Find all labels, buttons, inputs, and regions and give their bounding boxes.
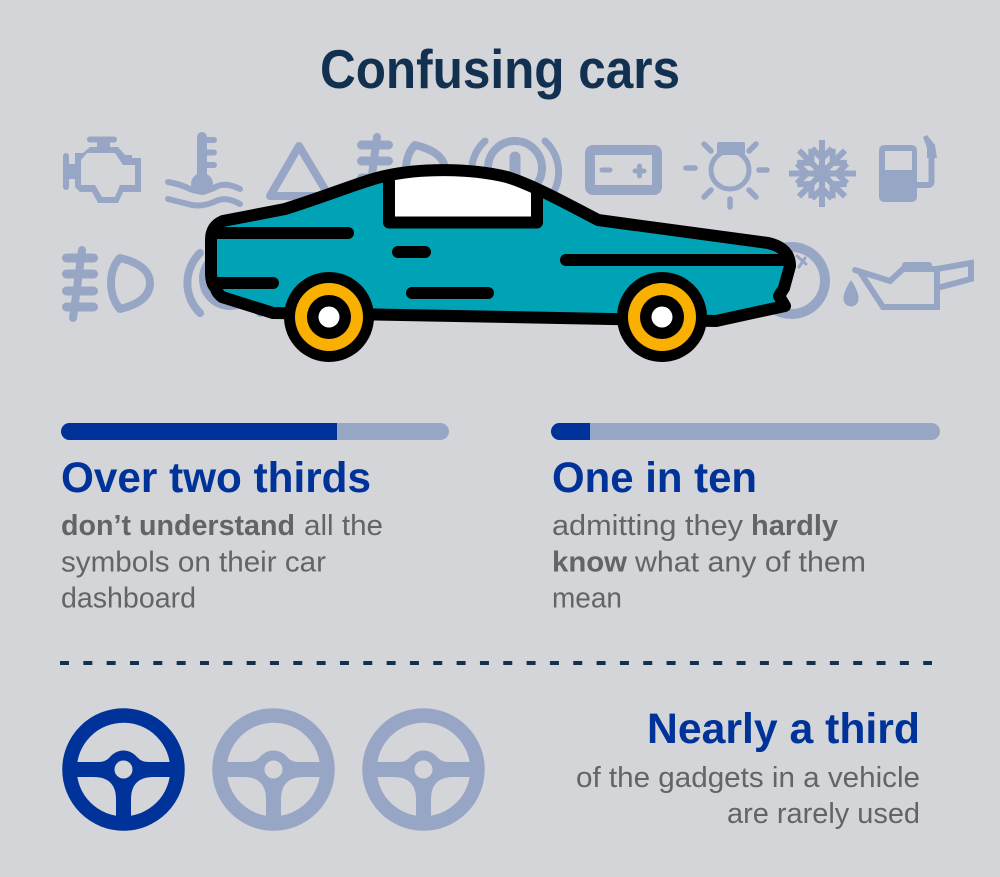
title: Confusing cars xyxy=(320,38,680,100)
text block: one in ten: admitting they xyxy=(552,510,744,542)
text block: over two thirds: all the xyxy=(304,510,383,542)
text block: one in ten: One in ten xyxy=(552,454,757,502)
icon: bulb lamp xyxy=(686,142,767,207)
car window xyxy=(395,172,531,217)
text block: one in ten: what any of them xyxy=(634,546,866,578)
progress bar: over two thirds xyxy=(61,423,449,440)
dashboard icons background xyxy=(66,135,971,318)
icon: coolant temperature xyxy=(168,137,240,206)
icon: snowflake xyxy=(787,138,857,209)
text block: one in ten: mean xyxy=(552,582,622,614)
window frame xyxy=(389,178,537,222)
icon: warning triangle xyxy=(270,146,329,196)
text block: nearly a third xyxy=(576,705,920,830)
text block: over two thirds: symbols on their car xyxy=(61,546,327,578)
icon: speed gauge xyxy=(758,247,825,314)
progress bar: one in ten xyxy=(551,423,940,440)
text block: nearly a third: of the gadgets in a vehicle xyxy=(576,762,920,794)
steering wheel: dark xyxy=(70,716,178,824)
text block: over two thirds xyxy=(61,454,383,614)
steering wheel: light 2 xyxy=(370,716,478,824)
icon: engine xyxy=(66,140,141,203)
icon: fuel pump xyxy=(879,135,937,202)
icon: fog light lower xyxy=(66,250,150,318)
car body fill xyxy=(211,170,790,321)
text block: nearly a third: are rarely used xyxy=(727,798,920,830)
steering wheel: light 1 xyxy=(220,716,328,824)
text block: one in ten xyxy=(552,454,866,614)
car illustration xyxy=(211,170,790,362)
icon: oil can xyxy=(843,263,971,307)
text block: one in ten: know xyxy=(552,546,628,578)
car body outline xyxy=(211,170,790,321)
text block: over two thirds: don’t understand xyxy=(61,510,295,542)
icon: brake warning upper xyxy=(471,141,559,203)
text block: nearly a third: Nearly a third xyxy=(647,705,920,753)
icon: battery xyxy=(590,150,657,190)
rear wheel xyxy=(617,272,707,362)
icon: brake warning lower xyxy=(187,252,273,313)
text block: over two thirds: dashboard xyxy=(61,582,196,614)
text block: over two thirds: Over two thirds xyxy=(61,454,371,502)
text block: one in ten: hardly xyxy=(751,510,838,542)
car body lines xyxy=(216,233,783,293)
front wheel xyxy=(284,272,374,362)
icon: fog light upper xyxy=(362,137,445,205)
